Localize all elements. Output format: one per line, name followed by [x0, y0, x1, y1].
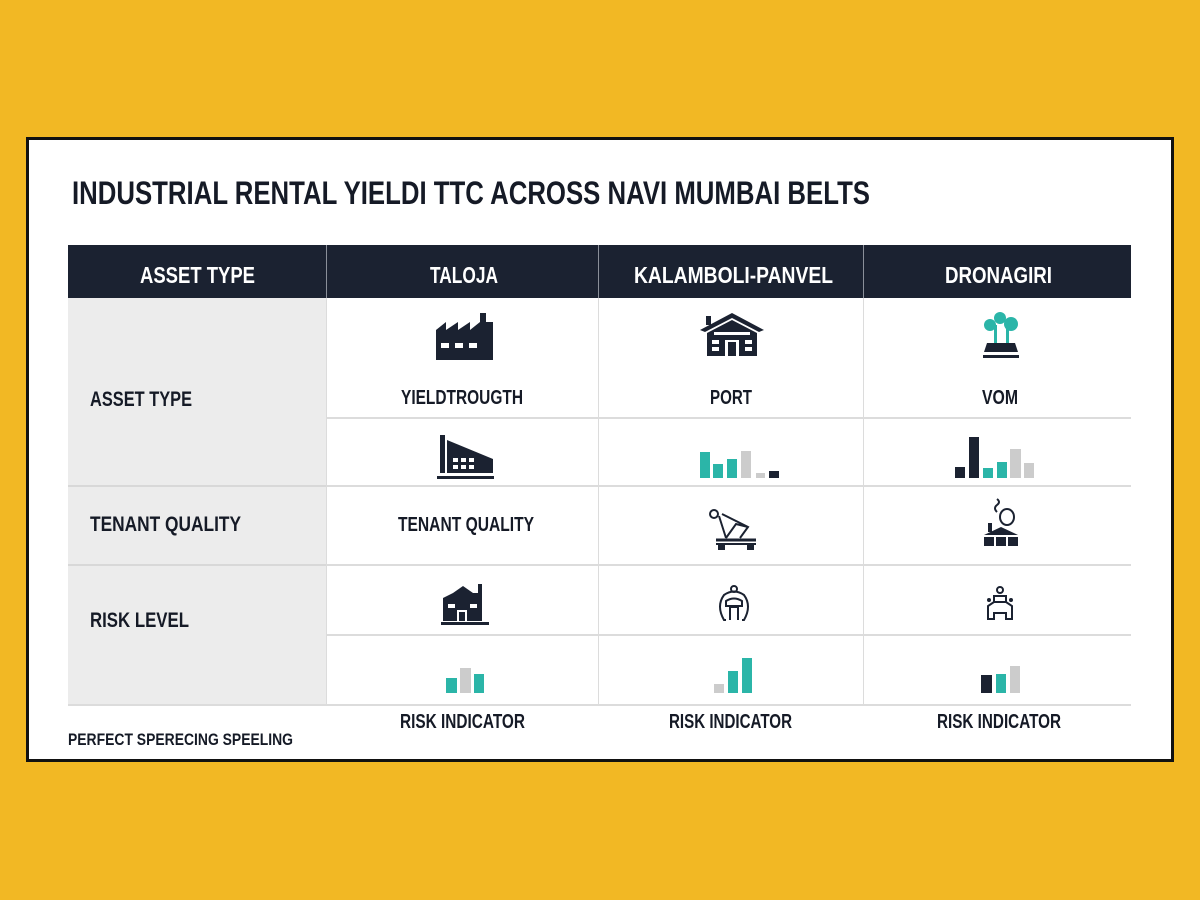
card [28, 138, 1172, 760]
left label column: TENANT QUALITY [90, 513, 241, 536]
icon: worker [988, 587, 1012, 619]
bar chart: kalamboli yield [700, 451, 779, 478]
icon: person dome [720, 586, 748, 620]
bar chart: dronagiri yield [955, 437, 1034, 478]
left label column: ASSET TYPE [90, 388, 192, 411]
header row: ASSET TYPE [140, 262, 255, 288]
header row [68, 245, 1131, 298]
risk indicator labels: RISK INDICATOR [400, 711, 525, 733]
header row: TALOJA [430, 262, 498, 288]
risk indicator labels: RISK INDICATOR [669, 711, 792, 733]
bar chart: taloja risk [446, 668, 484, 693]
left label column: RISK LEVEL [90, 609, 189, 632]
table: VOM [982, 387, 1018, 409]
row1 labels: YIELDTROUGTH [401, 387, 523, 409]
grid lines [68, 298, 1131, 705]
icon: trees [983, 312, 1019, 358]
left label column [68, 298, 326, 705]
icon: factory [436, 313, 493, 360]
icon: warehouse [437, 435, 494, 479]
table: PORT [710, 387, 752, 409]
icon: crane [710, 510, 756, 549]
table [68, 245, 1131, 705]
icon: house [700, 313, 764, 356]
header row: KALAMBOLI-PANVEL [634, 262, 833, 288]
tenant quality row: TENANT QUALITY [398, 514, 535, 536]
header row: DRONAGIRI [945, 262, 1052, 288]
icon: factory with smoke [984, 499, 1018, 546]
icon: house risk [441, 584, 489, 625]
risk indicator labels [400, 711, 1061, 733]
bar chart: dronagiri risk [981, 666, 1020, 693]
risk indicator labels: RISK INDICATOR [937, 711, 1061, 733]
title: INDUSTRIAL RENTAL YIELDI TTC ACROSS NAVI MUMBAI BELTS [72, 175, 870, 211]
footer note: PERFECT SPERECING SPEELING [68, 730, 293, 749]
bar chart: kalamboli risk [714, 658, 752, 693]
